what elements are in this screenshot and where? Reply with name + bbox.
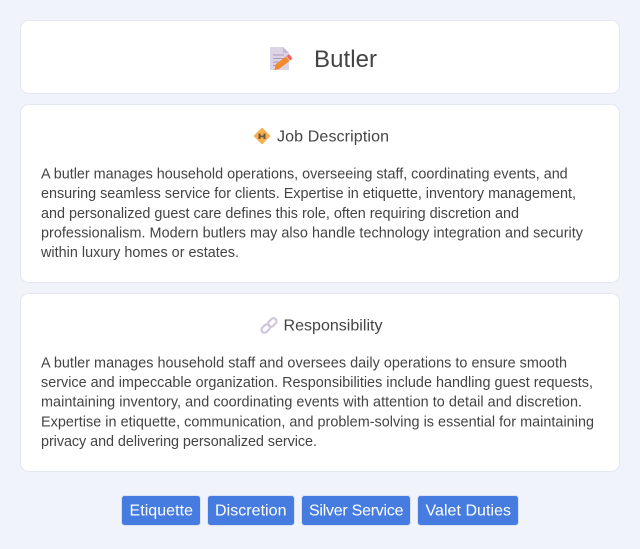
tag: valet duties: Valet Duties: [426, 502, 511, 520]
tag: silver service: [302, 496, 410, 526]
text block: job description: A butler manages household operations, overseeing staff, coordinating events, and: [41, 166, 568, 182]
tag: valet duties: [418, 496, 518, 526]
icon: chain link: [260, 317, 278, 334]
text block: responsibility: Expertise in etiquette, communication, and problem-solving is essential for maintaining: [41, 414, 594, 430]
icon: orange diamond: [254, 128, 270, 144]
text block: job description: within luxury homes or estates.: [40, 245, 239, 261]
text block: responsibility: service and impeccable organization. Responsibilities include handling guest requests,: [41, 375, 593, 391]
panel: responsibility: [20, 294, 620, 472]
panel: job description: [20, 104, 620, 282]
text block: responsibility: A butler manages household staff and oversees daily operations to ensure smooth: [41, 356, 567, 372]
text block: job description: ensuring seamless service for clients. Expertise in etiquette, inventory management,: [41, 186, 576, 202]
tag: discretion: [208, 496, 294, 526]
text block: job description: and personalized guest care defines this role, often requiring discretion and: [41, 206, 519, 222]
icon: document with pencil: [270, 47, 292, 70]
title: Butler: [314, 46, 377, 73]
text block: responsibility: [41, 356, 594, 450]
tag: discretion: Discretion: [215, 502, 286, 520]
heading: job description: Job Description: [277, 129, 389, 146]
tag: etiquette: Etiquette: [130, 502, 193, 520]
text block: responsibility: privacy and delivering personalized service.: [41, 434, 317, 450]
tag row: [122, 496, 518, 526]
tag: silver service: Silver Service: [309, 502, 404, 520]
panel: title header: [20, 20, 620, 94]
heading: responsibility: Responsibility: [284, 318, 382, 335]
text block: responsibility: maintaining inventory, and coordinating events with attention to detail and discretion.: [41, 395, 582, 411]
text block: job description: professionalism. Modern butlers may also handle technology integration and security: [41, 225, 584, 241]
tag: etiquette: [122, 496, 200, 526]
text block: job description: [40, 166, 584, 261]
